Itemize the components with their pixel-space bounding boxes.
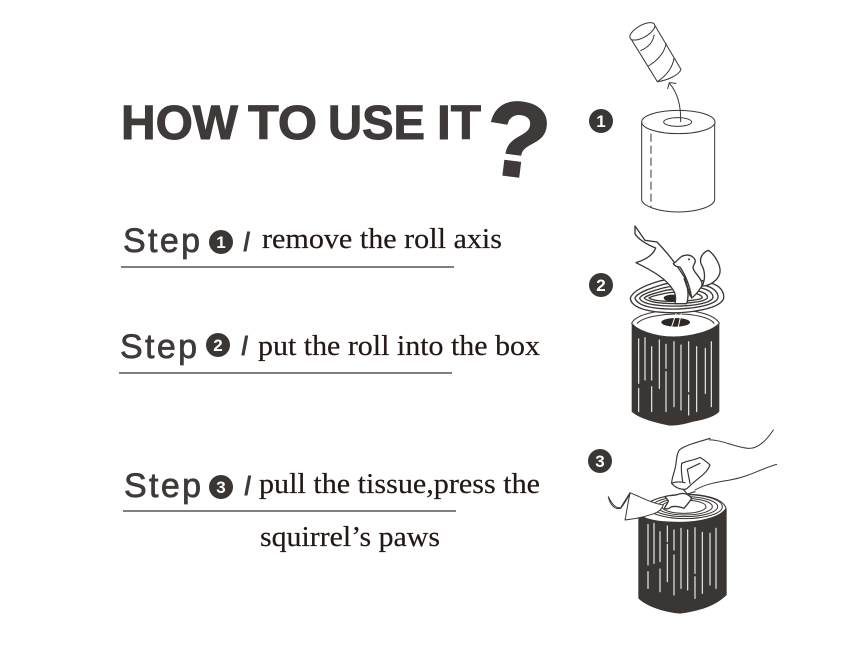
step 1 text: Step <box>123 222 200 260</box>
hand and squirrel close-up <box>664 438 710 509</box>
illustration: tissue roll and squirrel lid <box>630 226 724 313</box>
step 3 text: pull the tissue,press the <box>259 468 540 500</box>
badge 1: 1 <box>596 112 606 131</box>
squirrel <box>664 493 692 509</box>
title: TO <box>248 97 317 150</box>
badge 2 <box>589 273 613 297</box>
step 1 text: / <box>243 227 251 257</box>
illustration: stump box with tissue <box>632 310 719 426</box>
step 1 text: remove the roll axis <box>262 223 502 255</box>
step 1 text <box>121 222 502 267</box>
step 2 text: Step <box>120 328 197 366</box>
title: USE <box>328 97 425 150</box>
trunk grooves <box>639 338 711 415</box>
wrist lines <box>695 430 777 490</box>
title: ? <box>478 78 557 203</box>
illustration: roll and axis <box>627 19 715 212</box>
step 3 text: Step <box>124 467 201 505</box>
title: IT <box>437 97 481 150</box>
badge 3 <box>588 449 612 473</box>
step 3 text: squirrel’s paws <box>260 521 440 553</box>
badge 3: 3 <box>595 452 605 471</box>
step 1 text: 1 <box>216 233 226 252</box>
illustration: stump with squirrel and hand <box>608 430 777 614</box>
title: HOW <box>121 97 239 150</box>
step 2 text: 2 <box>213 336 223 355</box>
trunk grooves <box>648 523 716 598</box>
badge 2: 2 <box>596 276 606 295</box>
squirrel <box>701 250 720 286</box>
step 3 text <box>123 467 540 553</box>
title <box>121 78 557 203</box>
step 2 text: / <box>241 331 249 361</box>
step 2 text <box>119 328 541 373</box>
badge 1 <box>589 109 613 133</box>
step 2 text: put the roll into the box <box>258 330 541 362</box>
step 3 text: 3 <box>216 478 226 497</box>
step 3 text: / <box>244 471 252 501</box>
tissue sheet <box>635 226 688 304</box>
tissue sheet <box>608 493 663 520</box>
